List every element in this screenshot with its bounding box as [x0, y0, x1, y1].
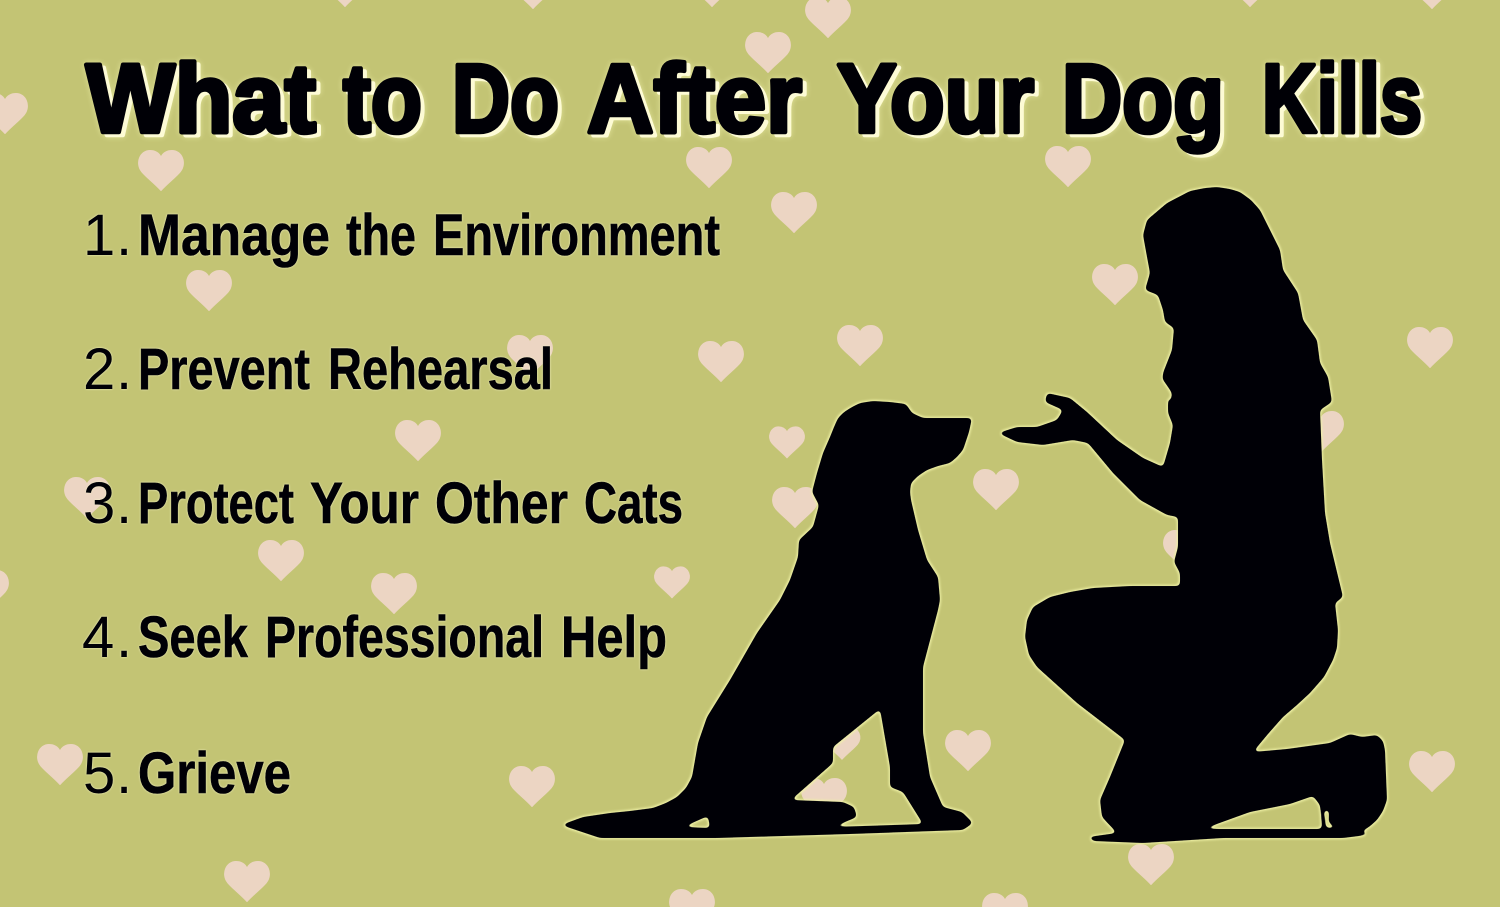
title: Dog — [1062, 44, 1224, 153]
list item 3: Your — [310, 471, 419, 536]
title: After — [587, 44, 802, 153]
woman silhouette — [998, 187, 1387, 843]
list item 1: the — [346, 203, 416, 268]
list item 3: 3 — [83, 471, 115, 536]
list item 2: . — [116, 337, 132, 402]
list item 5: 5 — [83, 741, 115, 806]
list item 4: 4 — [82, 605, 114, 670]
title: What — [86, 44, 316, 153]
list item 2: 2 — [83, 337, 115, 402]
list item 3: . — [116, 471, 132, 536]
list item 4: Professional — [265, 605, 544, 670]
list item 1: . — [116, 203, 132, 268]
list item 1: 1 — [83, 203, 115, 268]
title: Do — [452, 44, 559, 153]
list item 2: Prevent — [138, 337, 310, 402]
list item 5: Grieve — [138, 741, 291, 806]
list item 1: Manage — [138, 203, 330, 268]
list item 5 — [83, 741, 291, 806]
title: Your — [837, 44, 1034, 153]
list item 3: Cats — [584, 471, 683, 536]
list item 2 — [83, 337, 553, 402]
list item 4: . — [116, 605, 132, 670]
list item 3: Other — [435, 471, 568, 536]
list item 3: Protect — [138, 471, 294, 536]
title — [86, 44, 1422, 153]
list item 3 — [83, 471, 683, 536]
dog silhouette — [561, 401, 973, 838]
list item 2: Rehearsal — [328, 337, 553, 402]
title: to — [343, 44, 422, 153]
list item 4 — [82, 605, 667, 670]
list item 4: Seek — [138, 605, 249, 670]
list item 5: . — [116, 741, 132, 806]
list item 1 — [83, 203, 720, 268]
list item 1: Environment — [433, 203, 720, 268]
list item 4: Help — [561, 605, 667, 670]
title: Kills — [1262, 44, 1422, 153]
